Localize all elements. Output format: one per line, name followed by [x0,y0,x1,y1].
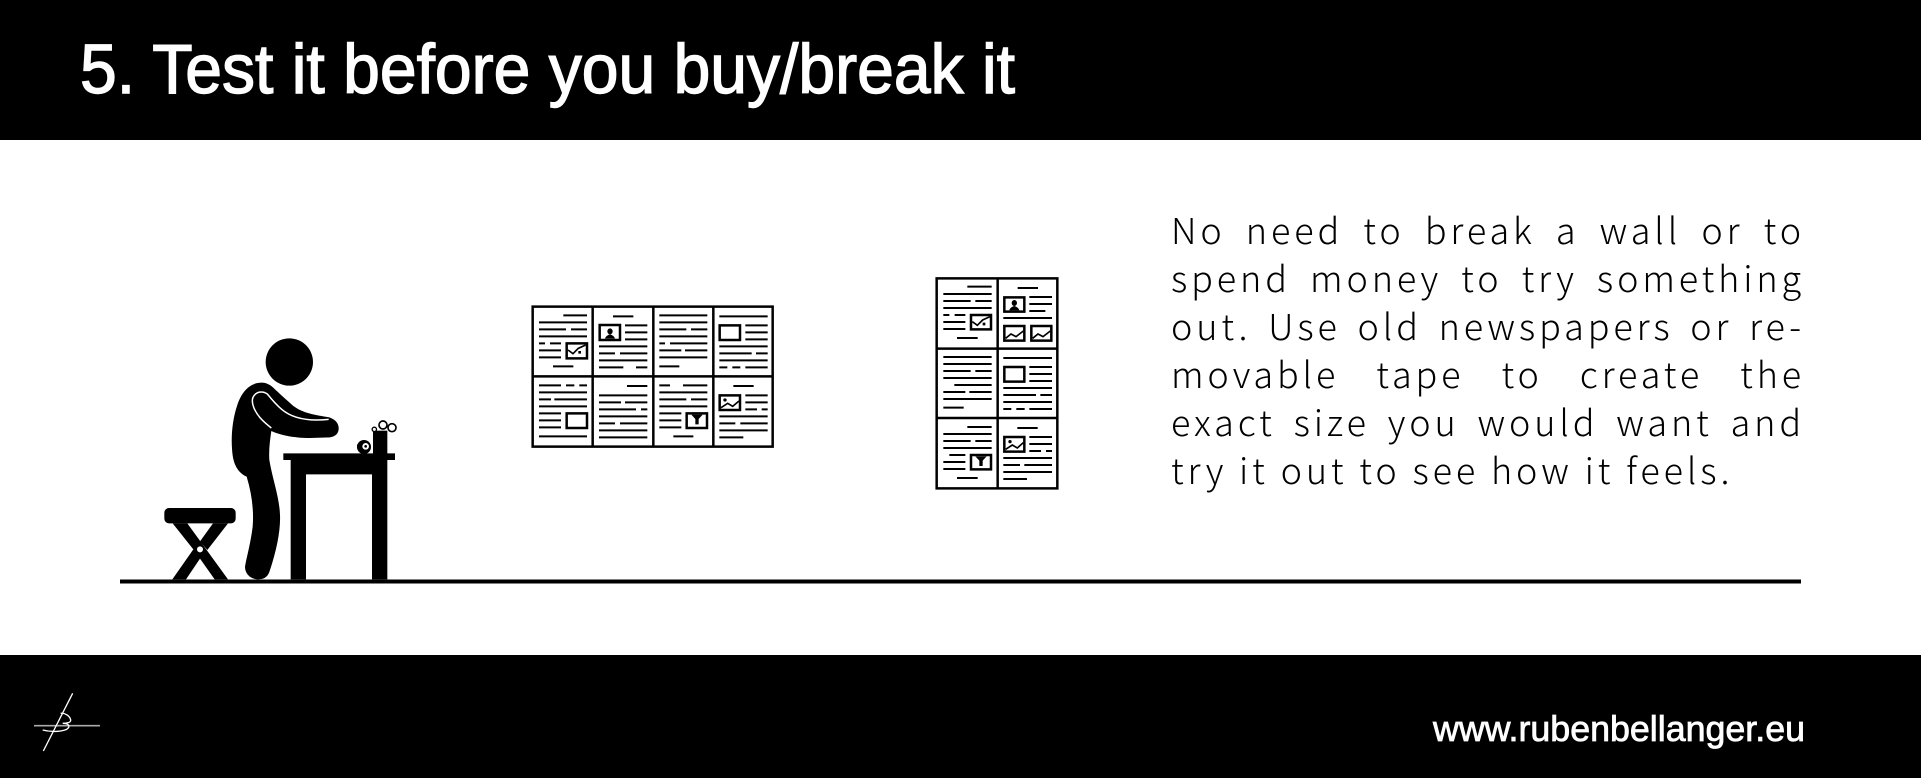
description text: movable tape to create the [1171,347,1805,399]
text lines [539,315,768,437]
page grid [937,278,1057,488]
logo [34,693,100,751]
body and arm [232,383,339,579]
thumbnail figures [578,328,727,424]
pen cup with scissors [372,421,396,454]
chart and landscape thumbnails [972,317,1050,449]
title: 5. Test it before you buy/break it [80,30,1015,108]
picture frames [567,325,740,428]
text lines [943,287,1052,479]
ground line [120,580,1801,584]
description text: exact size you would want and [1171,395,1805,447]
arm outline [252,392,329,428]
website url: www.rubenbellanger.eu [1432,708,1805,749]
page grid [533,307,773,447]
header bar [0,0,1921,140]
newspaper layout: horizontal [533,307,773,447]
thumbnail figures [975,300,1019,466]
description text: out. Use old newspapers or re- [1171,299,1805,351]
stool [164,508,236,579]
description text: try it out to see how it feels. [1171,443,1733,495]
newspaper layout: vertical [937,278,1057,488]
chart and landscape thumbnails [568,345,739,408]
description text: spend money to try something [1171,251,1805,303]
tape dispenser [357,440,371,454]
footer bar [0,655,1921,778]
table [283,453,395,579]
icon: person working at a table with stool [164,338,396,579]
head [266,338,313,386]
description text [1171,203,1805,495]
description text: No need to break a wall or to [1171,203,1805,255]
picture frames [971,297,1051,469]
